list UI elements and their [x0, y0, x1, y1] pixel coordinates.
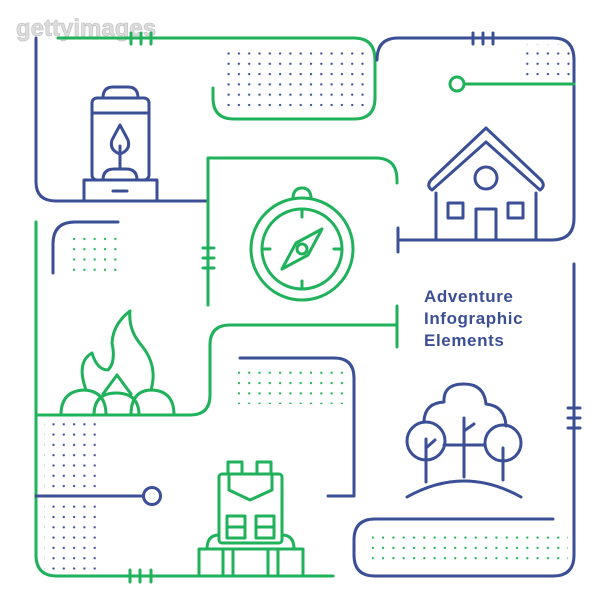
- watermark: gettyimages: [16, 15, 156, 42]
- icon: backpack: [199, 462, 303, 576]
- frame: bottom-right blue frame: [354, 264, 580, 576]
- title: Adventure: [424, 287, 513, 306]
- title: [424, 287, 523, 350]
- icon: house: [429, 128, 543, 240]
- frame: small blue corner with green dots: [53, 222, 120, 276]
- frame: top green dotted box: [58, 33, 375, 119]
- icon: compass: [251, 188, 353, 300]
- title: Infographic: [424, 309, 523, 328]
- icon: lantern: [84, 87, 157, 201]
- title: Elements: [424, 331, 504, 350]
- icon: campfire: [61, 311, 174, 415]
- icon: trees: [407, 384, 521, 497]
- frame: compass green frame: [203, 158, 397, 305]
- frame: top-right blue house frame: [377, 33, 574, 252]
- frame: left blue dots and connector: [36, 422, 160, 572]
- frame: top-left blue lantern frame: [36, 38, 207, 201]
- frame: middle blue frame: [238, 358, 354, 496]
- frame: left green frame: [36, 222, 397, 582]
